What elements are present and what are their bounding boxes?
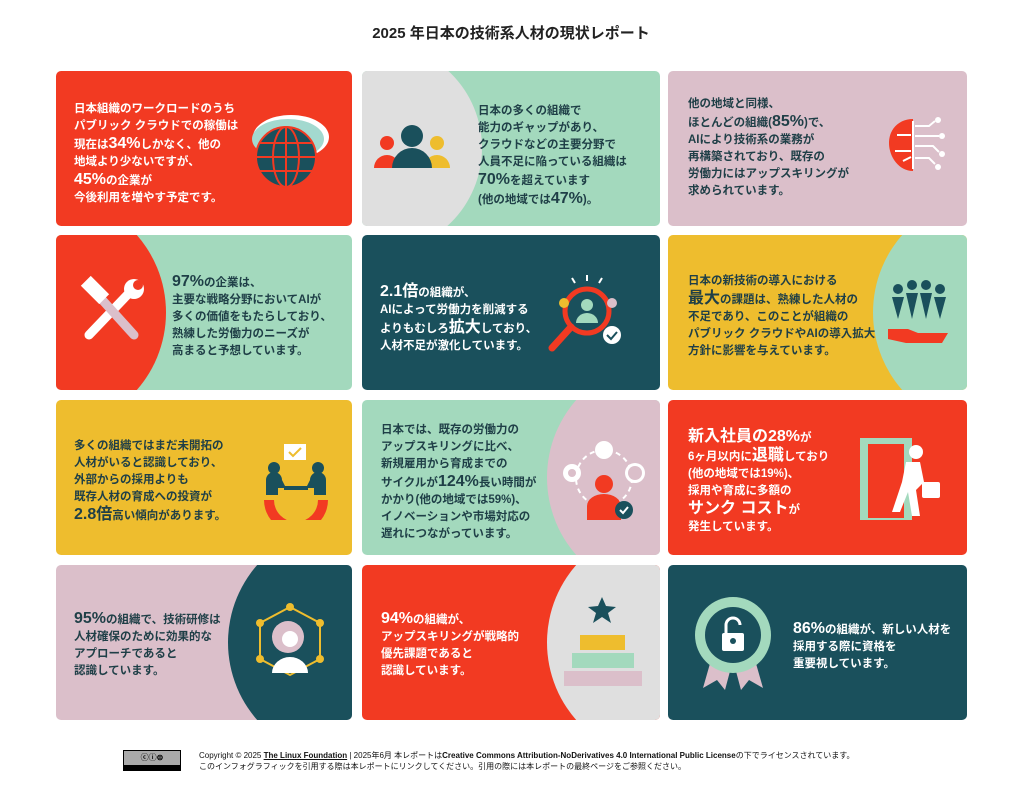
text: training: 認識しています。 [74, 665, 165, 677]
panel: turnover [668, 400, 967, 555]
icon: cc license [123, 750, 181, 771]
text: 2.1x [380, 282, 537, 352]
text: talent: 2.8倍高い傾向があります。 [74, 506, 226, 523]
panel: training [56, 565, 352, 720]
text: AI: 求められています。 [688, 185, 790, 197]
text: AI value: 主要な戦略分野においてAIが [172, 294, 321, 306]
text: talent [74, 439, 226, 523]
icon: podium star [564, 597, 642, 686]
text: cloud [74, 102, 238, 204]
text: cloud: 現在は34%しかなく、他の [74, 135, 221, 152]
text: AI: 労働力にはアップスキリングが [688, 168, 849, 180]
text: priority: 優先課題であると [381, 648, 473, 660]
panel: cloud workload [56, 71, 352, 226]
text: certifications: 86%の組織が、新しい人材を [793, 620, 951, 637]
text: copyright: このインフォグラフィックを引用する際は本レポートにリンクしてください。引用の際には本レポートの最終ページをご参照ください。 [199, 762, 686, 771]
text: challenge: 日本の新技術の導入における [688, 275, 838, 287]
text: AI value: 97%の企業は、 [172, 273, 262, 290]
text: certifications [793, 620, 951, 670]
text: AI: 他の地域と同様、 [688, 98, 780, 110]
text: 2.1x: 人材不足が激化しています。 [380, 340, 528, 352]
text: skills gap: 日本の多くの組織で [478, 105, 582, 117]
text: AI value: 多くの価値をもたらしており、 [172, 311, 332, 323]
text: priority: 94%の組織が、 [381, 610, 470, 627]
text: challenge: 最大の課題は、熟練した人材の [688, 290, 858, 307]
text: challenge: 方針に影響を与えています。 [688, 345, 836, 357]
text: talent: 既存人材の育成への投資が [74, 491, 212, 503]
panel: AI restructuring [668, 71, 967, 226]
text: talent: 人材がいると認識しており、 [74, 457, 222, 469]
text: certifications: 重要視しています。 [793, 658, 895, 670]
text: talent: 外部からの採用よりも [74, 474, 189, 486]
icon: meeting gear [264, 444, 328, 520]
text: challenge: 不足であり、このことが組織の [688, 311, 848, 323]
text: cloud: 45%の企業が [74, 171, 152, 188]
text: turnover: (他の地域では19%)、 [688, 468, 799, 480]
text: priority: アップスキリングが戦略的 [381, 631, 519, 643]
icon: cloud globe [252, 115, 329, 186]
text: 2.1x: AIによって労働力を削減する [380, 304, 529, 316]
text: turnover: 6ヶ月以内に退職しており [688, 447, 829, 464]
icon: person with ideas [563, 441, 645, 520]
text: skills gap [478, 104, 627, 207]
icon: hand with people [888, 280, 948, 343]
text: cycle: かかり(他の地域では59%)、 [381, 494, 527, 506]
text: skills gap: 70%を超えています [478, 171, 590, 188]
panel: skills gap [362, 71, 660, 226]
text: priority [381, 610, 519, 677]
text: AI value: 高まると予想しています。 [172, 345, 309, 357]
text: AI [688, 97, 849, 197]
text: training: 95%の組織で、技術研修は [74, 610, 221, 627]
icon: network person [256, 603, 324, 676]
text: turnover: サンク コストが [688, 500, 800, 517]
text: cycle [381, 423, 536, 540]
icon: badge [695, 597, 771, 690]
text: cycle: イノベーションや市場対応の [381, 511, 530, 523]
icon: brain [889, 117, 945, 171]
text: skills gap: 能力のギャップがあり、 [478, 122, 604, 134]
panel: reskilling cycle [362, 400, 660, 555]
footer [123, 750, 855, 771]
text: cloud: 地域より少ないですが、 [74, 156, 200, 168]
icon: door exit [860, 438, 940, 520]
text: turnover: 新入社員の28%が [688, 428, 812, 445]
text: AI value [172, 273, 332, 357]
text: 2.1x: 2.1倍の組織が、 [380, 283, 476, 300]
text: challenge: パブリック クラウドやAIの導入拡大 [688, 328, 875, 340]
panel: upskilling priority [362, 565, 660, 720]
title: 2025 年日本の技術系人材の現状レポート [372, 25, 650, 42]
text: certifications: 採用する際に資格を [793, 641, 896, 653]
text: training: 人材確保のために効果的な [74, 631, 212, 643]
text: cycle: 新規雇用から育成までの [381, 458, 508, 470]
text: AI value: 熟練した労働力のニーズが [172, 328, 309, 340]
panel: biggest challenge [668, 235, 967, 390]
text: skills gap: 人員不足に陥っている組織は [478, 156, 627, 168]
text: priority: 認識しています。 [381, 665, 472, 677]
text: 2.1x: よりもむしろ拡大しており、 [380, 319, 537, 336]
text: cloud: 日本組織のワークロードのうち [74, 103, 235, 115]
text: talent: 多くの組織ではまだ未開拓の [74, 440, 224, 452]
text: cycle: アップスキリングに比べ、 [381, 441, 519, 453]
text: copyright [199, 751, 855, 771]
text: cloud: 今後利用を増やす予定です。 [74, 192, 222, 204]
text: copyright: Copyright © 2025 The Linux Foundation | 2025年6月 本レポートはCreative Commons Attribution-NoDerivatives 4.0 International Public Licenseの下でライセンスされています。 [199, 751, 855, 760]
text: AI: 再構築されており、既存の [688, 151, 825, 163]
text: training: アプローチであると [74, 648, 177, 660]
panel: certifications [668, 565, 967, 720]
icon: cc license: ⓒⓘ⊜ [141, 753, 163, 762]
text: cycle: サイクルが124%長い時間が [381, 473, 536, 490]
text: cycle: 日本では、既存の労働力の [381, 424, 519, 436]
icon: people [374, 125, 450, 168]
icon: tools [80, 276, 144, 340]
text: skills gap: (他の地域では47%)。 [478, 190, 598, 207]
panel: untapped talent [56, 400, 352, 555]
text: turnover [688, 427, 829, 533]
text: challenge [688, 274, 875, 357]
text: AI: AIにより技術系の業務が [688, 134, 814, 146]
text: cloud: パブリック クラウドでの稼働は [74, 120, 238, 132]
text: turnover: 発生しています。 [688, 521, 779, 533]
text: cycle: 遅れにつながっています。 [381, 528, 517, 540]
icon: magnifier people [548, 275, 621, 352]
text: skills gap: クラウドなどの主要分野で [478, 139, 616, 151]
text: training [74, 610, 221, 677]
panel: labor reduction [362, 235, 660, 390]
text: AI: ほとんどの組織(85%)で、 [688, 113, 830, 130]
text: turnover: 採用や育成に多額の [688, 485, 792, 497]
panel: AI value [56, 235, 352, 390]
